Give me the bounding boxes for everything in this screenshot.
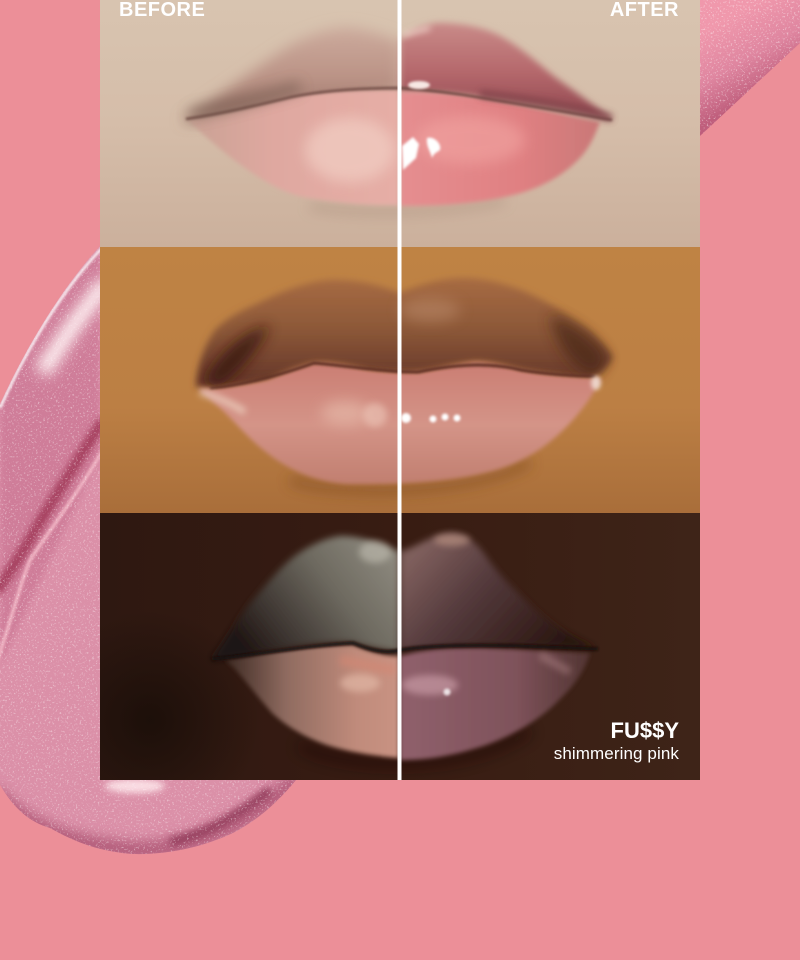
after: gloss highlights [402, 28, 440, 170]
lip gloss smear: top right [700, 0, 800, 136]
left corner glint [200, 392, 245, 412]
before: lower lip sheen [305, 118, 395, 182]
left corner shadow [205, 325, 270, 388]
right corner shadow [550, 315, 608, 376]
photo panel: fair skin lips [100, 0, 700, 247]
lip line [210, 363, 595, 388]
before: lower lip [188, 90, 399, 205]
after: lower lip [400, 648, 590, 760]
before: lower lip [225, 645, 399, 758]
shade description: shimmering pink [554, 744, 679, 763]
photo panel: medium skin lips [100, 247, 700, 513]
photo panel: deep skin lips [100, 513, 700, 780]
centre divider [398, 0, 402, 780]
vignette [100, 657, 218, 780]
before: upper lip [211, 536, 400, 660]
shade name: FU$$Y [611, 718, 679, 743]
upper lip [196, 278, 613, 387]
lip line [186, 88, 612, 120]
lip line [212, 643, 598, 659]
after: lower lip [400, 92, 600, 206]
gloss highlights [340, 534, 570, 696]
right corner glint [591, 376, 601, 390]
after: lower lip sheen [415, 116, 525, 164]
after: upper lip [400, 533, 597, 650]
gloss highlights [321, 298, 460, 427]
lip gloss smear: left [0, 230, 310, 870]
after: upper lip [400, 23, 613, 120]
lower lip [198, 362, 601, 484]
before: upper lip [184, 28, 400, 122]
